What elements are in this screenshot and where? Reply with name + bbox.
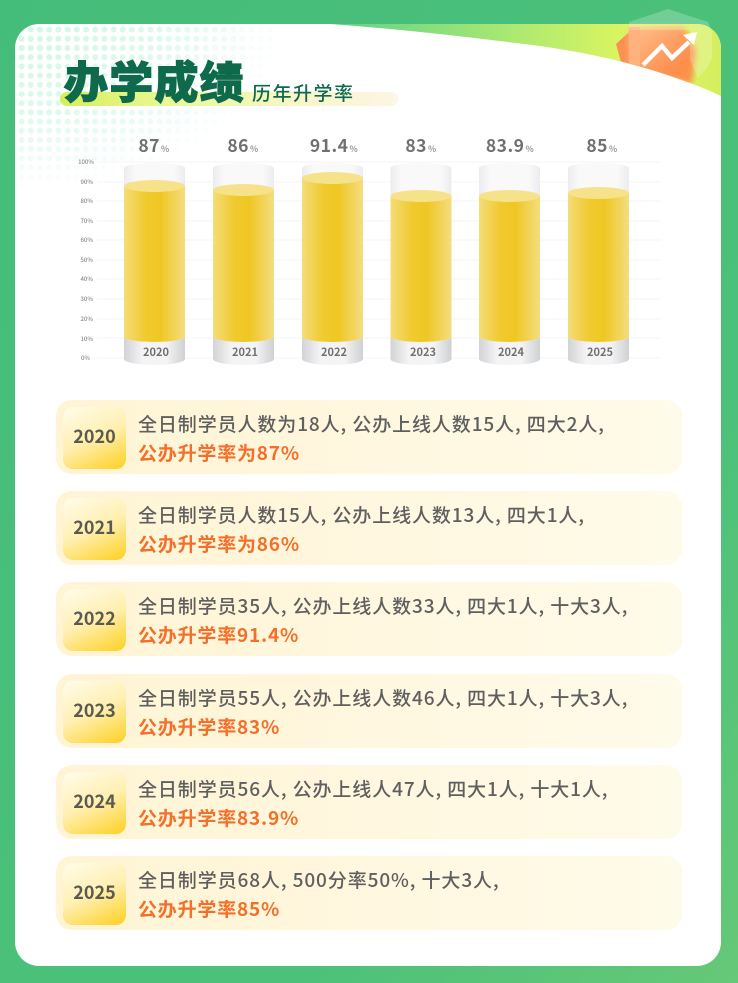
cylinder 2025: 85% bbox=[586, 133, 618, 158]
detail 2022: 全日制学员35人, 公办上线人数33人, 四大1人, 十大3人, bbox=[138, 592, 628, 619]
detail 2020: 全日制学员人数为18人, 公办上线人数15人, 四大2人, bbox=[138, 410, 605, 437]
cylinder 2024: 2024 bbox=[498, 344, 524, 360]
cylinder 2022 bbox=[302, 133, 363, 365]
grid lines and axis labels bbox=[78, 157, 661, 362]
cylinder 2020: 87% bbox=[138, 133, 170, 158]
cylinder 2023: 83% bbox=[405, 133, 437, 158]
cylinder 2021 bbox=[213, 133, 274, 365]
grid lines and axis labels: 50% bbox=[81, 255, 93, 264]
grid lines and axis labels: 70% bbox=[81, 216, 93, 225]
chart: admission rate cylinders bbox=[78, 133, 661, 365]
rate 2023: 公办升学率83% bbox=[138, 713, 280, 740]
year tile 2020: 2020 bbox=[73, 423, 116, 449]
detail 2023: 全日制学员55人, 公办上线人数46人, 四大1人, 十大3人, bbox=[138, 684, 628, 711]
subtitle: 历年升学率 bbox=[252, 79, 355, 106]
cylinder 2020 bbox=[124, 133, 185, 365]
cylinder 2025: 2025 bbox=[587, 344, 613, 360]
cylinder 2022: 2022 bbox=[321, 344, 347, 360]
rate 2022: 公办升学率91.4% bbox=[138, 621, 299, 648]
grid lines and axis labels: 10% bbox=[81, 334, 93, 343]
rate 2021: 公办升学率为86% bbox=[138, 530, 300, 557]
grid lines and axis labels: 0% bbox=[81, 353, 90, 362]
grid lines and axis labels: 30% bbox=[81, 294, 93, 303]
year tile 2023 bbox=[63, 681, 126, 743]
year tile 2025: 2025 bbox=[73, 879, 116, 905]
year tile 2023: 2023 bbox=[73, 697, 116, 723]
year tile 2024 bbox=[63, 772, 126, 834]
card: 2020 bbox=[56, 400, 682, 474]
year tile 2024: 2024 bbox=[73, 788, 116, 814]
card: 2024 bbox=[56, 765, 682, 839]
year tile 2022 bbox=[63, 589, 126, 651]
card: 2025 bbox=[56, 856, 682, 930]
grid lines and axis labels: 40% bbox=[81, 274, 93, 283]
year tile 2025 bbox=[63, 863, 126, 925]
title highlight bar bbox=[60, 92, 398, 106]
grid lines and axis labels: 90% bbox=[81, 177, 93, 186]
cylinder 2024 bbox=[479, 133, 540, 365]
grid lines and axis labels: 60% bbox=[81, 235, 93, 244]
rate 2020: 公办升学率为87% bbox=[138, 439, 300, 466]
cylinder 2022: 91.4% bbox=[310, 133, 358, 158]
rate 2025: 公办升学率85% bbox=[138, 895, 280, 922]
cylinder 2021: 2021 bbox=[232, 344, 258, 360]
cylinder 2023: 2023 bbox=[410, 344, 436, 360]
year tile 2020 bbox=[63, 407, 126, 469]
year tile 2021: 2021 bbox=[73, 514, 116, 540]
year tile 2022: 2022 bbox=[73, 605, 116, 631]
detail 2021: 全日制学员人数15人, 公办上线人数13人, 四大1人, bbox=[138, 501, 585, 528]
icon: growth shield with arrow bbox=[616, 9, 712, 84]
cylinder 2023 bbox=[390, 133, 452, 365]
cylinder 2021: 86% bbox=[227, 133, 259, 158]
cylinder 2020: 2020 bbox=[143, 344, 169, 360]
grid lines and axis labels: 20% bbox=[81, 314, 93, 323]
card: 2021 bbox=[56, 491, 682, 565]
year tile 2021 bbox=[63, 498, 126, 560]
card: 2023 bbox=[56, 674, 682, 748]
cylinder 2024: 83.9% bbox=[486, 133, 534, 158]
title block bbox=[60, 47, 398, 111]
card: 2022 bbox=[56, 582, 682, 656]
rate 2024: 公办升学率83.9% bbox=[138, 804, 299, 831]
detail 2025: 全日制学员68人, 500分率50%, 十大3人, bbox=[138, 866, 500, 893]
title: 办学成绩 bbox=[64, 47, 245, 111]
cylinder 2025 bbox=[568, 133, 629, 365]
grid lines and axis labels: 80% bbox=[81, 196, 93, 205]
detail 2024: 全日制学员56人, 公办上线人47人, 四大1人, 十大1人, bbox=[138, 775, 608, 802]
grid lines and axis labels: 100% bbox=[78, 157, 94, 166]
